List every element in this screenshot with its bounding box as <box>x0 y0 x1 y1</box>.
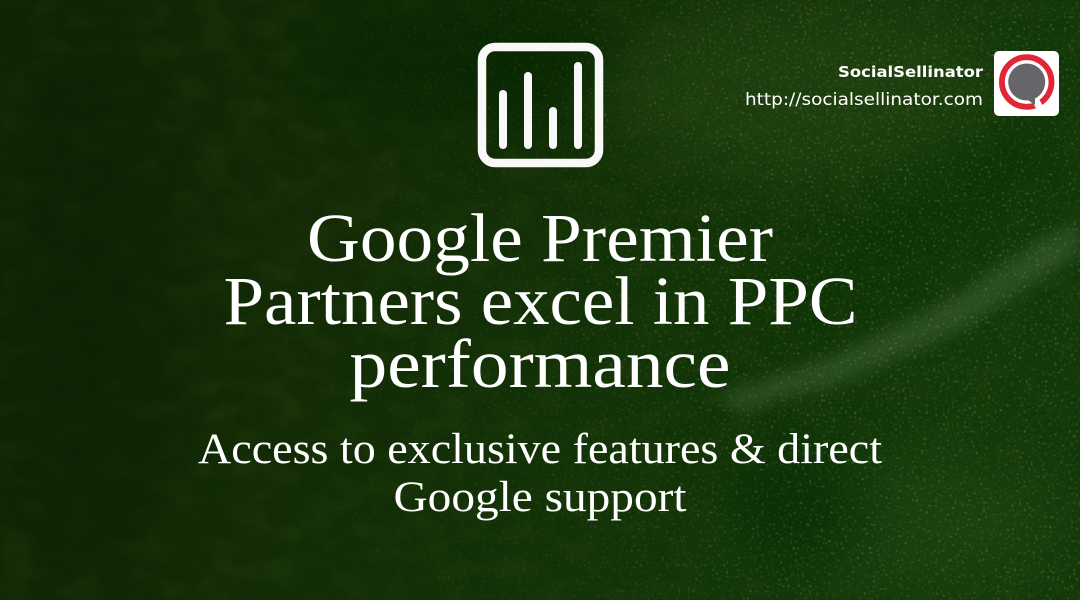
title <box>224 200 858 402</box>
subtitle: Google support <box>394 474 687 521</box>
title: Partners excel in PPC <box>224 263 858 339</box>
subtitle: Access to exclusive features & direct <box>198 426 882 473</box>
title: performance <box>350 326 730 402</box>
icon: bar chart in rounded square <box>482 47 599 163</box>
title: Google Premier <box>307 200 773 276</box>
brand name: SocialSellinator <box>838 63 983 81</box>
logo: SocialSellinator <box>994 51 1059 116</box>
brand URL: http://socialsellinator.com <box>745 90 983 109</box>
subtitle <box>198 426 882 521</box>
